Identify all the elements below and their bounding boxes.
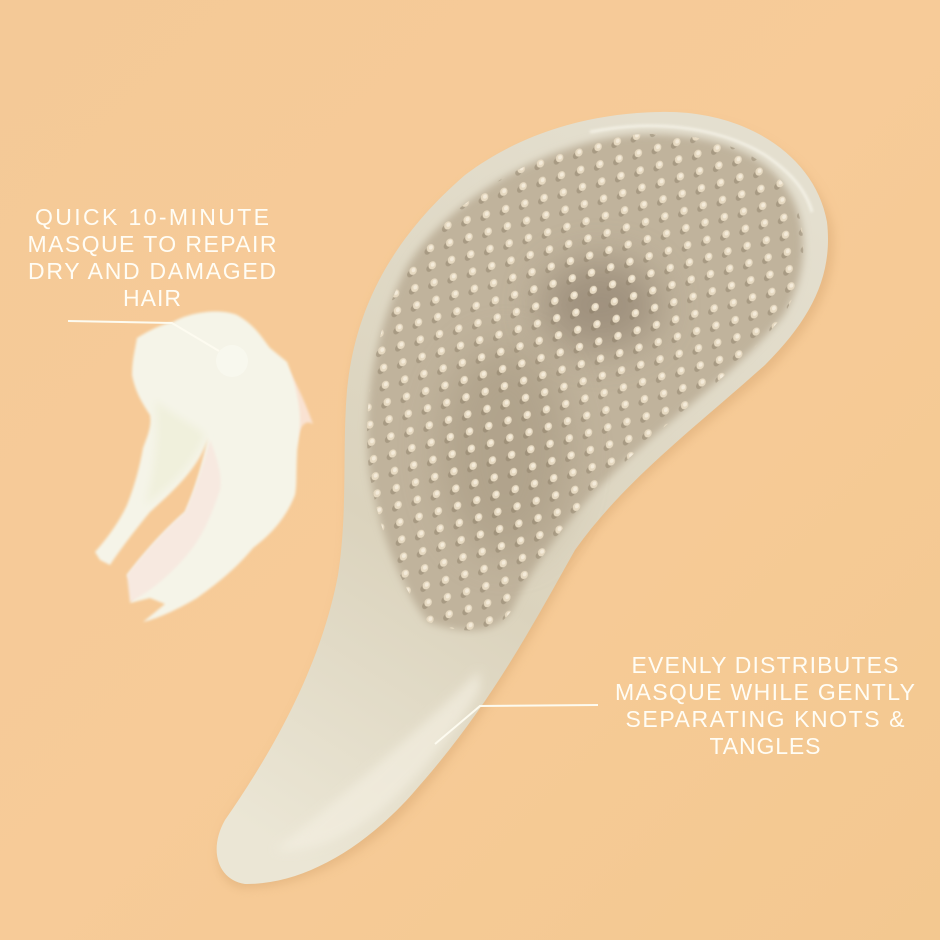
cream right edge [282, 360, 313, 450]
pad base [367, 134, 803, 630]
callout text: brush: TANGLES [710, 733, 820, 759]
cream swatch [95, 311, 313, 622]
cream shading [145, 400, 205, 505]
bristle pad [367, 134, 803, 630]
cream pink streak [127, 440, 221, 602]
callout text: masque: HAIR [123, 285, 181, 311]
handle gloss [275, 670, 480, 851]
marker dot [216, 345, 248, 377]
callout text: masque: DRY AND DAMAGED [28, 258, 276, 284]
brush shadow [218, 120, 833, 888]
pad lower stain [440, 345, 570, 555]
callout: masque [28, 204, 276, 377]
callout text: brush: SEPARATING KNOTS & [626, 706, 904, 732]
callout: brush [435, 652, 915, 759]
callout text: brush: MASQUE WHILE GENTLY [615, 679, 915, 705]
callout text: masque: MASQUE TO REPAIR [28, 231, 276, 257]
pad stain [540, 260, 660, 350]
callout text: masque: QUICK 10-MINUTE [35, 204, 269, 230]
brush [217, 112, 833, 888]
cream main smear [95, 311, 300, 622]
brush rim highlight [590, 126, 812, 212]
callout text: brush: EVENLY DISTRIBUTES [632, 652, 898, 678]
leader line: brush [435, 705, 598, 744]
bristles [367, 134, 803, 630]
callout text: masque [28, 204, 276, 311]
leader line: masque [68, 321, 219, 351]
callout text: brush [615, 652, 915, 759]
brush body [217, 112, 828, 884]
